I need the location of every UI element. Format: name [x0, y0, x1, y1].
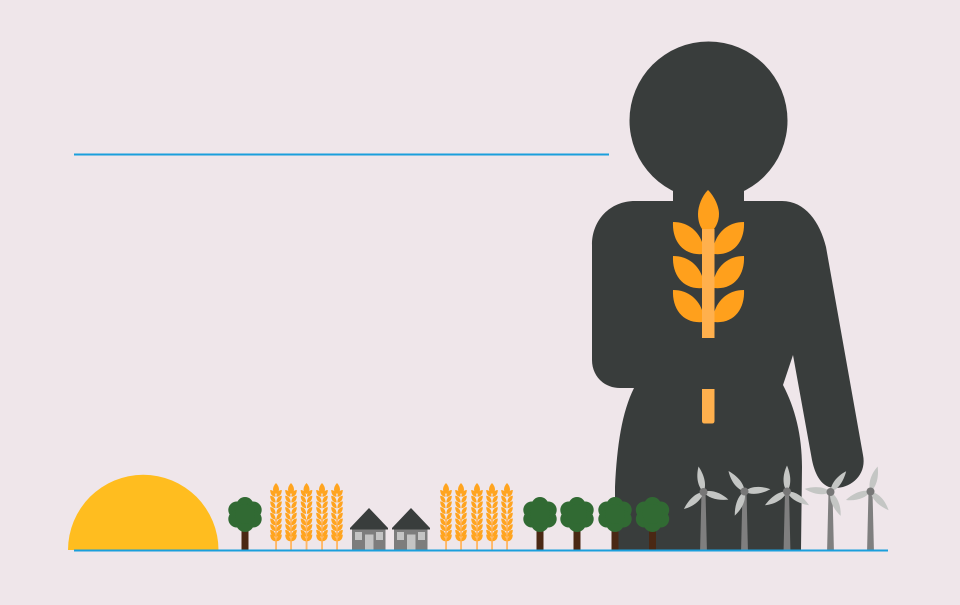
tree row [523, 497, 669, 550]
turbine 2 [726, 469, 771, 550]
figure body and arm [592, 201, 864, 550]
large wheat emblem [673, 190, 744, 424]
turbine 1 [682, 466, 729, 550]
sun [68, 475, 218, 550]
turbine 3 [763, 466, 811, 550]
silhouette figure [592, 42, 864, 550]
wind turbines [682, 466, 891, 550]
lower stem segment [702, 389, 714, 424]
top rule line [74, 154, 609, 156]
wheat stem [702, 229, 714, 338]
wheat field right [440, 483, 513, 550]
figure neck [673, 180, 744, 210]
wheat leaves [673, 190, 744, 322]
wheat field left [270, 483, 343, 550]
figure head [630, 42, 788, 200]
turbine 4 [804, 469, 849, 550]
houses [350, 508, 430, 550]
tree [228, 497, 262, 550]
ground line [74, 550, 888, 552]
turbine 5 [845, 466, 891, 550]
